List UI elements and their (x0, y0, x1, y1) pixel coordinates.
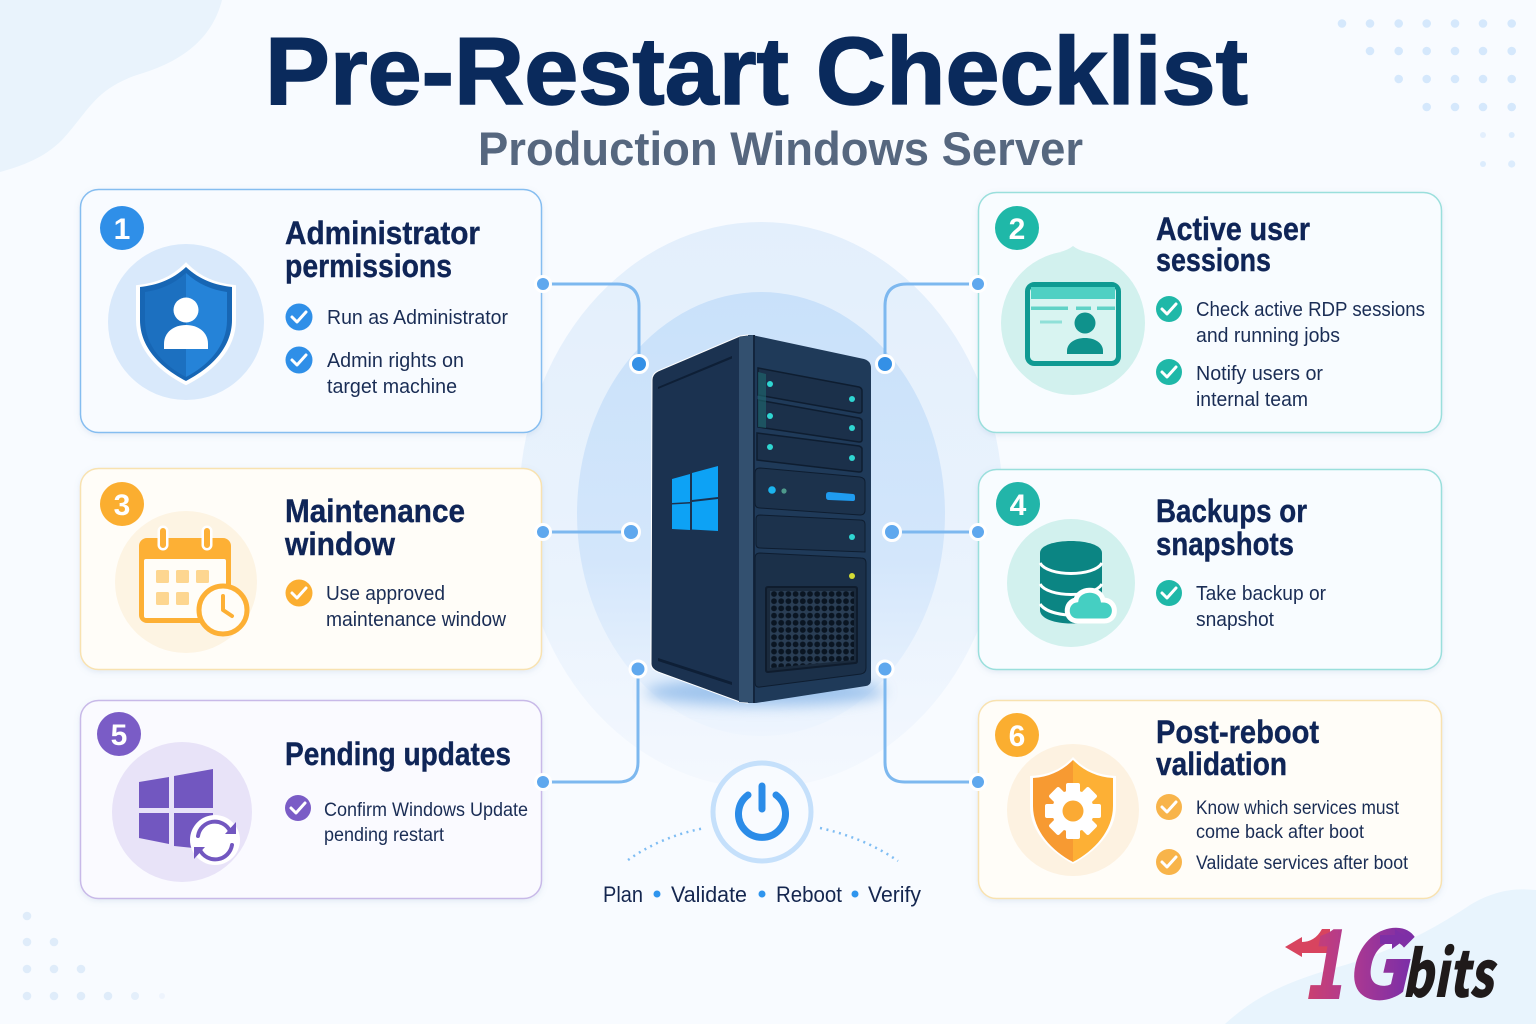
heading: validation (1156, 746, 1287, 782)
decorative dots: top right (1338, 19, 1516, 168)
heading: Maintenance (285, 493, 465, 529)
status lights (767, 381, 855, 579)
ventilation grille (766, 587, 857, 672)
panel 3: maintenance window (80, 468, 542, 670)
control panel (755, 468, 865, 515)
heading: Active user (1156, 211, 1310, 247)
check item: take backup: snapshot (1196, 609, 1274, 631)
title: Pre-Restart Checklist (265, 18, 1248, 125)
heading: window (284, 526, 395, 562)
badge 1: 1 (114, 213, 130, 246)
badge 2: 2 (1009, 213, 1025, 246)
heading: snapshots (1156, 526, 1294, 562)
connector: card 5 to server (536, 661, 646, 790)
icon: administrator shield (108, 244, 264, 400)
drive bay 1 (758, 368, 862, 413)
check item: run as administrator: Run as Administrator (327, 307, 508, 329)
badge 3 (100, 482, 144, 526)
process steps line (603, 882, 921, 907)
check item: take backup: Take backup or (1196, 583, 1326, 605)
heading: permissions (285, 248, 452, 284)
panel 1: administrator permissions (80, 190, 542, 432)
badge 2 (995, 206, 1039, 250)
check item: validate services: Validate services after boot (1196, 853, 1409, 874)
process steps line: Validate (671, 882, 747, 907)
1Gbits logo (1285, 888, 1498, 1024)
check item: confirm update: pending restart (324, 825, 445, 846)
icon: calendar with clock (115, 511, 257, 653)
heading: Backups or (1156, 493, 1307, 529)
badge 6 (995, 713, 1039, 757)
heading: Administrator (285, 215, 480, 251)
check item: know services: come back after boot (1196, 822, 1365, 843)
server tower (645, 335, 885, 706)
heading (284, 493, 465, 562)
check item: approved window: maintenance window (326, 609, 507, 631)
check item: admin rights: target machine (327, 376, 457, 398)
server left face (651, 335, 748, 703)
badge 1 (100, 206, 144, 250)
drive bay 2 (758, 400, 862, 442)
check item: know services (1156, 794, 1400, 843)
lower panel (755, 553, 866, 687)
connector: card 3 to server (536, 524, 640, 540)
heading: sessions (1156, 242, 1271, 278)
process steps line: Verify (868, 882, 921, 907)
panel 6: post-reboot validation (978, 700, 1442, 898)
connector: card 1 to server (536, 276, 648, 372)
heading: Pending updates (285, 736, 511, 772)
badge 4: 4 (1010, 489, 1027, 522)
check item: run as administrator (286, 304, 508, 330)
connector: card 2 to server (876, 276, 986, 372)
server front face (748, 335, 871, 703)
check item: confirm update: Confirm Windows Update (324, 800, 528, 821)
1Gbits logo: 1 (1303, 888, 1343, 1024)
background blob: top left (0, 0, 222, 172)
heading (1156, 211, 1310, 278)
process steps line: Reboot (776, 882, 842, 907)
heading (285, 215, 480, 284)
icon: database with cloud (1007, 519, 1135, 647)
icon: gear shield (1007, 744, 1139, 876)
check item: take backup (1156, 580, 1326, 631)
heading (1156, 714, 1319, 782)
heading (1156, 493, 1307, 562)
check item: notify users: Notify users or (1196, 363, 1323, 385)
check item: notify users: internal team (1196, 389, 1308, 411)
check item: approved window: Use approved (326, 583, 445, 605)
blank bay (756, 515, 865, 552)
panel 5: pending updates (80, 700, 542, 898)
panel 2: active user sessions (978, 192, 1442, 432)
check item: know services: Know which services must (1196, 798, 1400, 819)
process steps line: Plan (603, 882, 643, 907)
subtitle: Production Windows Server (478, 122, 1083, 175)
check item: check active sessions: Check active RDP sessions (1196, 299, 1425, 321)
connector: card 4 to server (884, 524, 986, 540)
connector: card 6 to server (877, 661, 986, 790)
check item: approved window (286, 580, 507, 631)
check item: confirm update (285, 795, 528, 846)
windows logo on server (672, 466, 718, 531)
server floor shadow (645, 678, 885, 706)
decorative dots: bottom left (23, 912, 165, 1000)
check item: check active sessions: and running jobs (1196, 325, 1340, 347)
badge 3: 3 (114, 489, 130, 522)
drive bay 3 (757, 433, 862, 472)
1Gbits logo: G (1343, 891, 1415, 1024)
1Gbits logo: bits (1402, 924, 1498, 1016)
panel 4: backups or snapshots (978, 470, 1442, 670)
background blob: bottom right (1225, 889, 1536, 1024)
check item: admin rights (286, 346, 464, 398)
check item: notify users (1156, 359, 1323, 411)
icon: power button (628, 763, 898, 861)
badge 6: 6 (1009, 720, 1025, 753)
check item: check active sessions (1156, 296, 1425, 347)
badge 5: 5 (111, 719, 127, 752)
heading: Post-reboot (1156, 714, 1319, 750)
check item: validate services (1156, 849, 1409, 875)
icon: windows update (112, 742, 252, 882)
icon: session window (1001, 246, 1145, 395)
check item: admin rights: Admin rights on (327, 350, 464, 372)
badge 4 (996, 482, 1040, 526)
central glow backdrop (519, 222, 1003, 788)
badge 5 (97, 712, 141, 756)
